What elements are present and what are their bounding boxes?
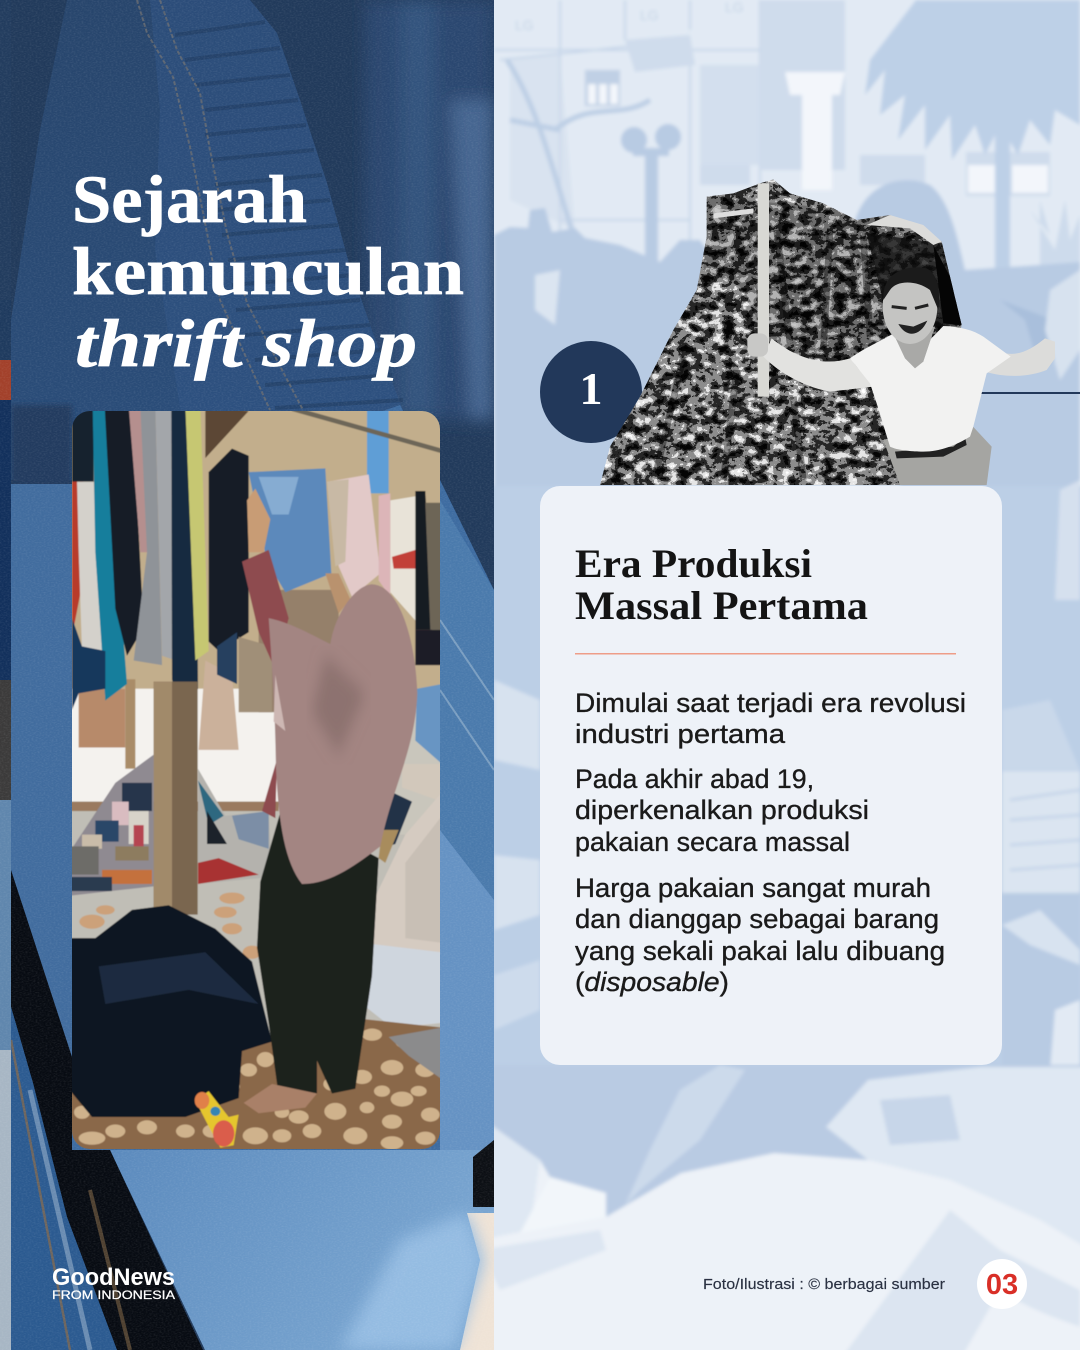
panel: denim background — [0, 0, 494, 1350]
title: thrift shop — [75, 305, 417, 381]
text block: paragraph 1: industri pertama — [575, 719, 786, 749]
logo: GoodNews: FROM INDONESIA — [52, 1288, 175, 1302]
accent line — [972, 392, 1080, 394]
text block: paragraph 3: yang sekali pakai lalu dibuang — [575, 936, 945, 966]
heading: Era Produksi — [575, 541, 812, 586]
black wedge — [11, 870, 203, 1350]
title — [72, 161, 464, 381]
jeans — [249, 468, 331, 592]
text block: paragraph 3 — [575, 873, 945, 997]
panel: crowd background: LG — [515, 17, 534, 33]
crowd — [494, 208, 705, 488]
text block: paragraph 3: dan dianggap sebagai barang — [575, 904, 939, 934]
dark heap — [69, 905, 272, 1117]
page number: 03 — [986, 1269, 1018, 1301]
text block: paragraph 2: Pada akhir abad 19, — [575, 764, 814, 794]
right blurred garment — [365, 0, 494, 420]
left strip — [0, 0, 11, 300]
corner elements — [473, 1140, 494, 1207]
left heap — [69, 755, 154, 896]
left strip — [494, 680, 540, 770]
right heap — [374, 800, 440, 952]
panel: info card — [540, 486, 1002, 1065]
text block: paragraph 2: pakaian secara massal — [575, 827, 850, 857]
denim waistband — [11, 0, 403, 480]
wood floor — [72, 1018, 440, 1149]
post — [154, 682, 198, 915]
buildings — [496, 2, 762, 238]
palm — [865, 0, 1080, 295]
text block: paragraph 2: diperkenalkan produksi — [575, 795, 869, 825]
seam — [11, 1007, 117, 1350]
hanging clothes — [72, 406, 272, 713]
photo credit: Foto/Ilustrasi : © berbagai sumber — [703, 1276, 945, 1293]
text block: paragraph 1: Dimulai saat terjadi era revolusi — [575, 688, 966, 718]
towels — [334, 474, 380, 596]
text block: paragraph 3: (disposable) — [575, 967, 729, 997]
photo: man with printed dress fabric — [590, 170, 1055, 487]
photo: woman sorting second-hand clothes — [62, 397, 452, 1169]
title: kemunculan — [72, 233, 464, 309]
heading — [575, 541, 868, 628]
lamp post — [621, 124, 681, 275]
middle heap — [198, 769, 272, 884]
page number — [977, 1259, 1027, 1309]
heading: Massal Pertama — [575, 583, 868, 628]
title: Sejarah — [72, 161, 307, 237]
lower denim — [110, 1150, 494, 1350]
logo: GoodNews: GoodNews — [52, 1264, 175, 1291]
right strip — [1055, 480, 1080, 600]
floor flowers — [79, 892, 261, 959]
icon: number badge — [540, 341, 642, 443]
icon: number badge: 1 — [580, 363, 602, 414]
person — [257, 806, 379, 1096]
toy — [195, 1091, 239, 1148]
text block: paragraph 2 — [575, 764, 869, 857]
text block: paragraph 3: Harga pakaian sangat murah — [575, 873, 931, 903]
text block: paragraph 1 — [575, 688, 966, 749]
panel: crowd background — [480, 0, 1080, 1350]
mid denim — [72, 405, 494, 1150]
panel: crowd background: LG — [640, 7, 659, 23]
bottom heap — [494, 1064, 1080, 1217]
